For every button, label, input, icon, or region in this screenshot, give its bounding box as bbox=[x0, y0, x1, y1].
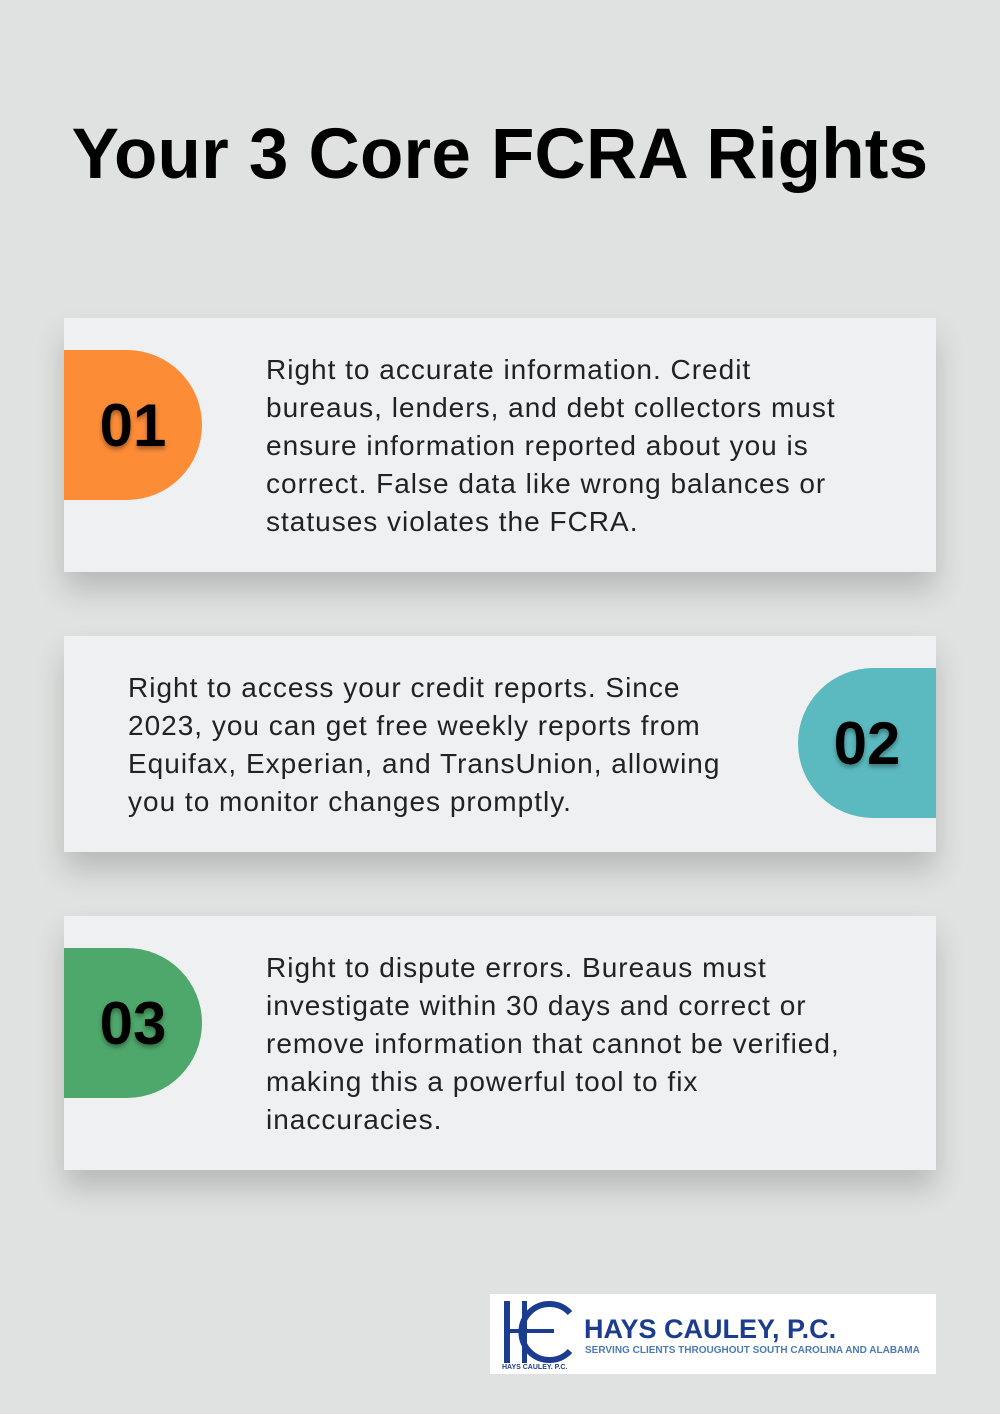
text 1: bureaus, lenders, and debt collectors must bbox=[266, 392, 836, 423]
title: Your 3 Core FCRA Rights bbox=[72, 115, 928, 194]
badge 03 bbox=[64, 948, 202, 1098]
text 3: remove information that cannot be verified, bbox=[266, 1028, 840, 1059]
text 2: Right to access your credit reports. Since bbox=[128, 672, 680, 703]
badge 02 bbox=[798, 668, 936, 818]
badge 01 bbox=[64, 350, 202, 500]
text 3: investigate within 30 days and correct or bbox=[266, 990, 807, 1021]
logo: SERVING CLIENTS THROUGHOUT SOUTH CAROLINA AND ALABAMA bbox=[585, 1345, 920, 1356]
text 2: Equifax, Experian, and TransUnion, allowing bbox=[128, 748, 720, 779]
badge 03: 03 bbox=[100, 990, 166, 1056]
text 2: you to monitor changes promptly. bbox=[128, 786, 572, 817]
text 2 bbox=[128, 672, 720, 817]
logo mark bbox=[502, 1301, 572, 1369]
panel: right 1 bbox=[64, 318, 936, 572]
panel: right 2 bbox=[64, 636, 936, 852]
text 1: ensure information reported about you is bbox=[266, 430, 809, 461]
logo text: HAYS CAULEY, P.C. bbox=[584, 1314, 836, 1344]
text 1: correct. False data like wrong balances or bbox=[266, 468, 826, 499]
text 3: Right to dispute errors. Bureaus must bbox=[266, 952, 767, 983]
text 3: making this a powerful tool to fix bbox=[266, 1066, 698, 1097]
text 3 bbox=[266, 952, 840, 1135]
logo bbox=[490, 1294, 936, 1374]
panel: right 3 bbox=[64, 916, 936, 1170]
text 1 bbox=[266, 354, 836, 537]
badge 02: 02 bbox=[834, 710, 900, 776]
text 2: 2023, you can get free weekly reports from bbox=[128, 710, 701, 741]
badge 01: 01 bbox=[100, 392, 166, 458]
text 1: Right to accurate information. Credit bbox=[266, 354, 751, 385]
text 3: inaccuracies. bbox=[266, 1104, 442, 1135]
text 1: statuses violates the FCRA. bbox=[266, 506, 638, 537]
